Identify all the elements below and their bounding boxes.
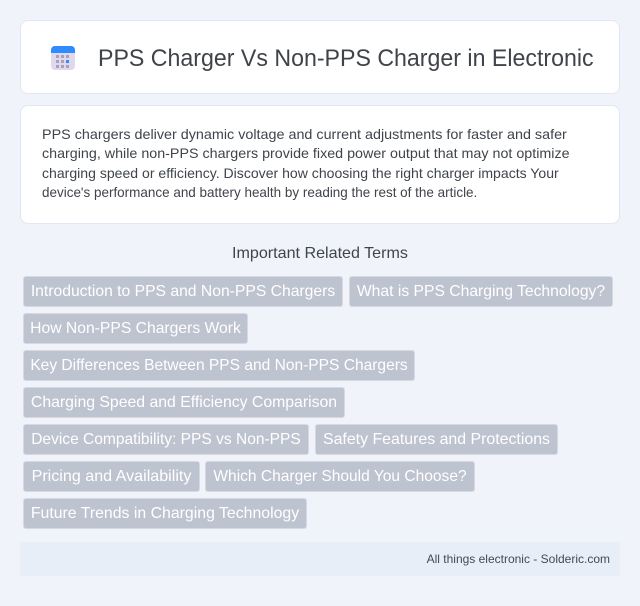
tag: Pricing and Availability [32, 467, 191, 485]
text: description paragraph: charging speed or efficiency. Discover how choosing the right charger impacts Your [42, 165, 559, 181]
tag [349, 276, 613, 307]
text: description paragraph [42, 126, 570, 200]
tag [23, 350, 415, 381]
tag: What is PPS Charging Technology? [357, 283, 605, 300]
title: PPS Charger Vs Non-PPS Charger in Electronic [98, 45, 594, 72]
tag: Introduction to PPS and Non-PPS Chargers [31, 283, 335, 300]
footer text: All things electronic - Solderic.com [427, 552, 610, 566]
tag: Which Charger Should You Choose? [213, 468, 467, 485]
text: description paragraph: PPS chargers deliver dynamic voltage and current adjustments for faster and safer [42, 126, 567, 142]
tag [23, 276, 343, 307]
tag: Safety Features and Protections [323, 431, 550, 448]
tag [23, 387, 345, 418]
tag: Key Differences Between PPS and Non-PPS Chargers [30, 357, 408, 374]
tag: Charging Speed and Efficiency Comparison [31, 394, 337, 411]
panel: header [20, 20, 620, 94]
tag [205, 461, 475, 492]
tag [23, 461, 200, 492]
heading: important related terms: Important Related Terms [232, 244, 408, 262]
text: description paragraph: charging, while non-PPS chargers provide fixed power output that may not optimize [42, 145, 570, 161]
text: description paragraph: device's performance and battery health by reading the rest of the article. [42, 184, 477, 200]
panel: description [20, 105, 620, 224]
tag [23, 424, 309, 455]
tag [23, 313, 248, 344]
tag: Future Trends in Charging Technology [31, 505, 299, 522]
tag [23, 498, 307, 529]
tag: Device Compatibility: PPS vs Non-PPS [31, 431, 301, 448]
icon: calendar [51, 46, 75, 70]
tag [315, 424, 558, 455]
tag: How Non-PPS Chargers Work [30, 320, 241, 337]
footer bar [20, 542, 620, 576]
tag list [23, 276, 613, 529]
